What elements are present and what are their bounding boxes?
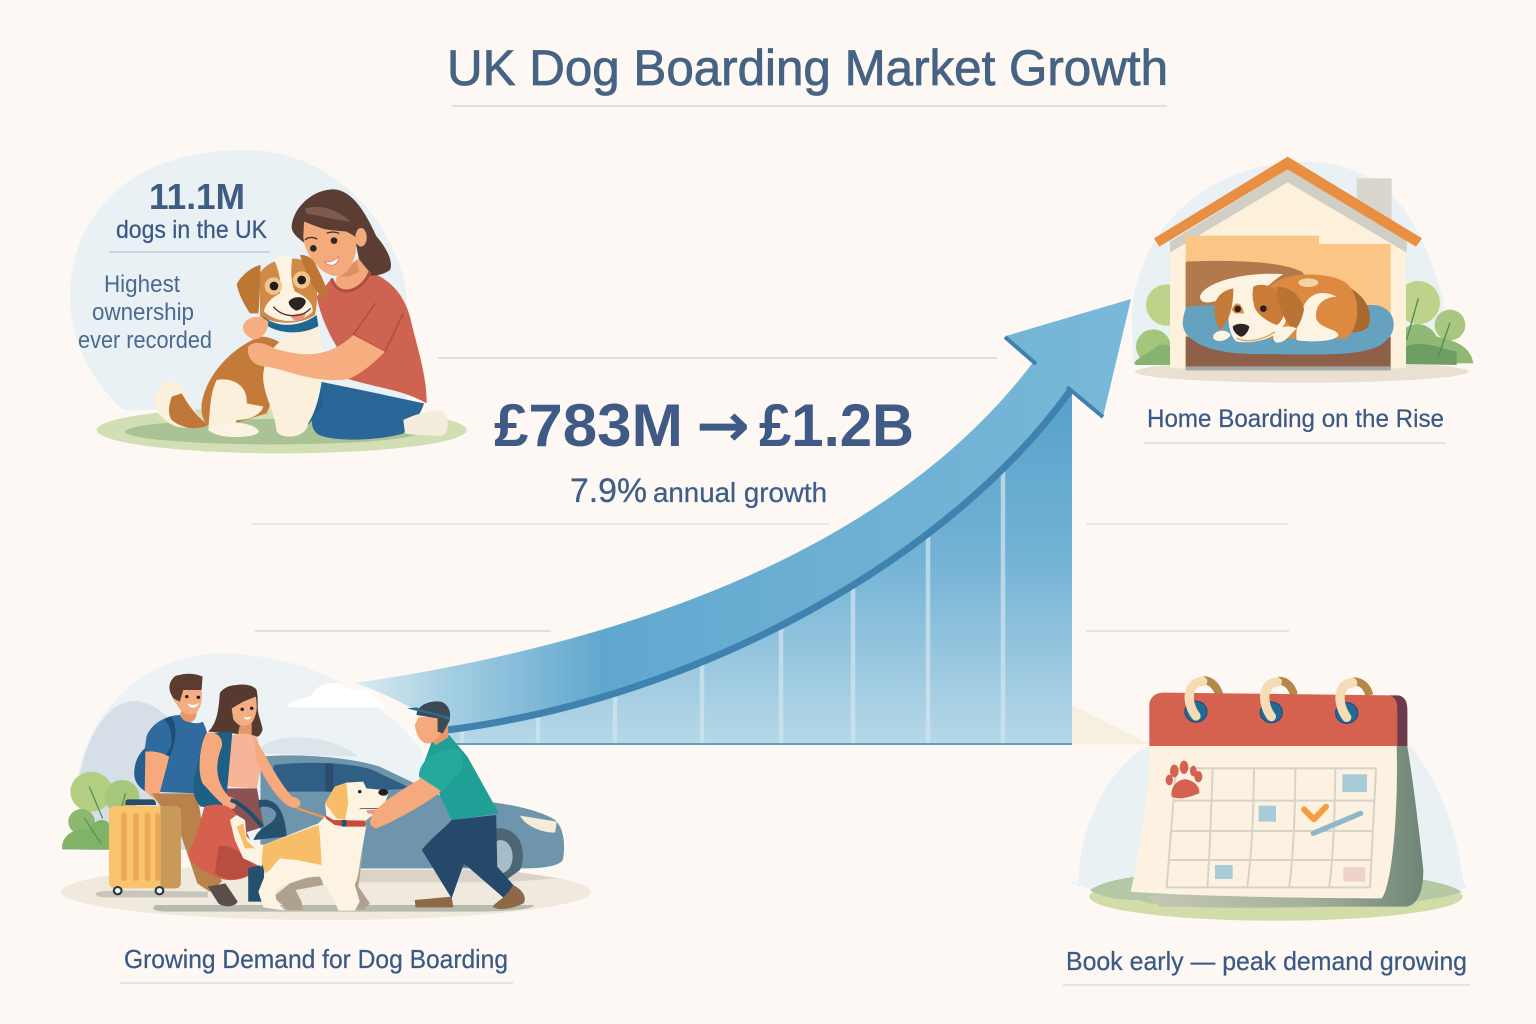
dog far legs (273, 850, 370, 910)
stat note: highest ownership (78, 271, 212, 354)
ring backs (1203, 680, 1369, 695)
dog head (260, 259, 317, 323)
leash (297, 808, 327, 818)
suitcase (125, 799, 156, 805)
stat: dogs in the UK: 11.1M (149, 176, 245, 217)
headline figure (494, 391, 914, 461)
growth rate (570, 472, 827, 510)
headline figure: £1.2B (759, 392, 914, 459)
label: growing demand: Growing Demand for Dog Boarding (124, 944, 508, 974)
headline figure: → (696, 391, 750, 461)
woman (208, 685, 263, 737)
label: home boarding: Home Boarding on the Rise (1147, 405, 1444, 433)
stat note: highest ownership: ownership (92, 299, 194, 326)
illustration: family handing dog to carer (61, 653, 591, 920)
dog body (258, 815, 366, 911)
neck (334, 258, 370, 291)
dog tail (230, 815, 270, 867)
stat: dogs in the UK (109, 176, 270, 252)
dog collar (263, 315, 318, 332)
area under curve with bars (447, 391, 1150, 744)
growth arrow chart (355, 299, 1150, 744)
stat note: highest ownership: ever recorded (78, 327, 212, 354)
stat note: highest ownership: Highest (104, 271, 180, 298)
arrow lower edge (447, 391, 1070, 730)
label: book early: Book early — peak demand growing (1066, 946, 1467, 976)
headline figure: £783M (494, 392, 683, 459)
title: UK Dog Boarding Market Growth (447, 40, 1168, 96)
illustration: owner hugging dog (70, 150, 467, 453)
dog head (325, 782, 388, 827)
hair back (292, 189, 391, 276)
car (260, 755, 564, 868)
man (134, 717, 178, 793)
arrow band and head (355, 299, 1131, 730)
arms (248, 335, 385, 380)
illustration: home boarding house (1132, 157, 1473, 383)
growth rate: annual growth (653, 477, 827, 508)
shirt (317, 272, 427, 403)
illustration: booking calendar (1069, 680, 1466, 921)
dog (154, 382, 208, 428)
growth rate: 7.9% (570, 472, 647, 510)
carer (419, 735, 499, 820)
stat: dogs in the UK: dogs in the UK (116, 216, 267, 244)
face (303, 222, 357, 276)
